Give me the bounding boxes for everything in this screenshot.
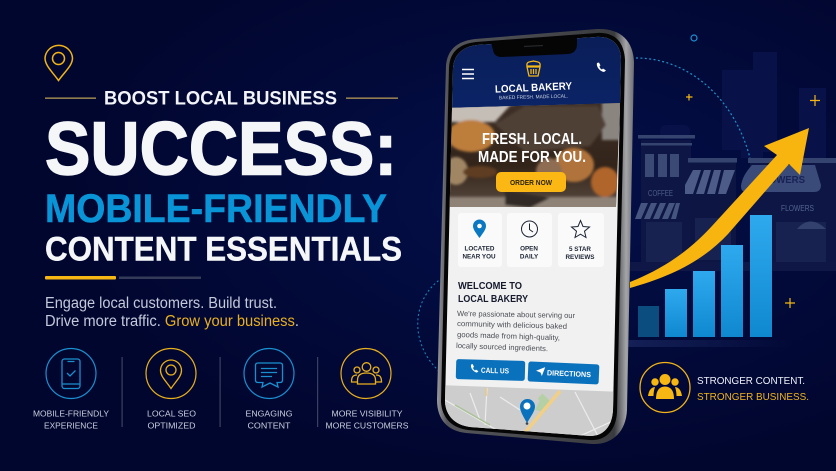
divider: [317, 357, 318, 427]
title: success: SUCCESS:: [45, 106, 397, 190]
hero photo: [450, 103, 620, 207]
plus accents: [686, 94, 820, 308]
phone icon: [597, 62, 606, 72]
phone: [437, 29, 634, 445]
directions button: [528, 361, 599, 385]
chart floor: [628, 340, 790, 347]
info card: located: NEAR YOU: [462, 254, 496, 260]
speaker: [524, 46, 543, 47]
storefront: center shop: [685, 158, 737, 268]
street: [630, 262, 836, 271]
storefront: flowers shop: FLOWERS: [781, 204, 814, 213]
welcome body text: [456, 309, 576, 353]
hamburger menu: [462, 70, 474, 78]
phone notch: [491, 36, 577, 57]
welcome body text: We're passionate about serving our: [457, 309, 576, 320]
call us button: [456, 359, 525, 381]
map: [445, 385, 614, 436]
hero headline: MADE FOR YOU.: [478, 149, 586, 166]
storefront: flowers shop: FLOWERS: [757, 175, 805, 186]
welcome heading: WELCOME TO: [458, 280, 522, 292]
eyebrow rule left: [45, 98, 96, 99]
storefront: coffee shop: [635, 135, 695, 268]
feature: mobile-friendly: MOBILE-FRIENDLY: [33, 408, 109, 418]
badge text: [697, 375, 809, 403]
city skyline: [660, 52, 826, 158]
title: content essentials: CONTENT ESSENTIALS: [45, 230, 402, 268]
app tagline: BAKED FRESH. MADE LOCAL.: [499, 94, 568, 101]
info card: reviews: REVIEWS: [565, 254, 595, 261]
hero headline: FRESH. LOCAL.: [482, 131, 582, 148]
badge text: STRONGER CONTENT.: [697, 375, 805, 387]
info card: reviews: 5 STAR: [569, 246, 591, 253]
welcome body text: goods made from high-quality,: [457, 330, 560, 342]
directions button: DIRECTIONS: [547, 368, 591, 379]
accent rule: [45, 276, 201, 280]
phone screen: [445, 36, 621, 436]
subheading: [45, 295, 299, 330]
hero headline: [478, 133, 586, 162]
badge text: STRONGER BUSINESS.: [697, 391, 809, 403]
bar chart: [638, 215, 772, 337]
feature: local seo: OPTIMIZED: [148, 420, 196, 430]
basket logo: [527, 61, 540, 76]
eyebrow heading: BOOST LOCAL BUSINESS: [104, 88, 337, 110]
order button: [496, 172, 566, 192]
feature: more visibility: MORE VISIBILITY: [332, 408, 403, 418]
feature: more visibility: MORE CUSTOMERS: [326, 420, 409, 430]
order button: ORDER NOW: [510, 178, 553, 187]
feature: more visibility: [326, 348, 409, 430]
phone bezel: [441, 33, 625, 440]
divider: [122, 357, 123, 427]
welcome heading: LOCAL BAKERY: [458, 293, 528, 305]
storefront: coffee shop: COFFEE: [648, 189, 673, 198]
feature: local seo: LOCAL SEO: [147, 408, 196, 418]
feature: engaging content: ENGAGING: [246, 408, 293, 418]
subheading: Drive more traffic. Grow your business.: [45, 313, 299, 330]
dotted arc: [636, 58, 750, 158]
app header: [452, 36, 621, 108]
info card: located: [458, 213, 502, 267]
eyebrow rule right: [346, 98, 398, 99]
badge icon: people: [640, 362, 690, 412]
growth arrow: [630, 128, 809, 288]
app title: LOCAL BAKERY: [495, 80, 572, 96]
info card: reviews: [558, 213, 604, 267]
subheading: Engage local customers. Build trust.: [45, 295, 277, 312]
location pin icon: [45, 45, 72, 80]
welcome heading: [458, 282, 528, 302]
phone frame: [437, 29, 634, 444]
storefront: flowers shop: [741, 158, 836, 268]
feature: mobile-friendly: [33, 348, 109, 430]
title: mobile-friendly: MOBILE-FRIENDLY: [45, 187, 387, 231]
call us button: CALL US: [481, 366, 509, 375]
divider: [220, 357, 221, 427]
feature: local seo: [146, 348, 196, 430]
small circle accent: [691, 35, 697, 41]
feature: engaging content: CONTENT: [248, 420, 291, 430]
info card: open: [507, 213, 552, 267]
welcome body text: locally sourced ingredients.: [456, 341, 548, 353]
dotted arc left of phone: [418, 278, 442, 372]
welcome body text: community with delicious baked: [457, 319, 567, 331]
map pin: [520, 399, 535, 425]
info card: open: OPEN: [520, 246, 538, 252]
info card: located: LOCATED: [465, 246, 495, 252]
feature: mobile-friendly: EXPERIENCE: [44, 420, 98, 430]
feature: engaging content: [244, 348, 294, 430]
info card: open: DAILY: [520, 254, 539, 260]
